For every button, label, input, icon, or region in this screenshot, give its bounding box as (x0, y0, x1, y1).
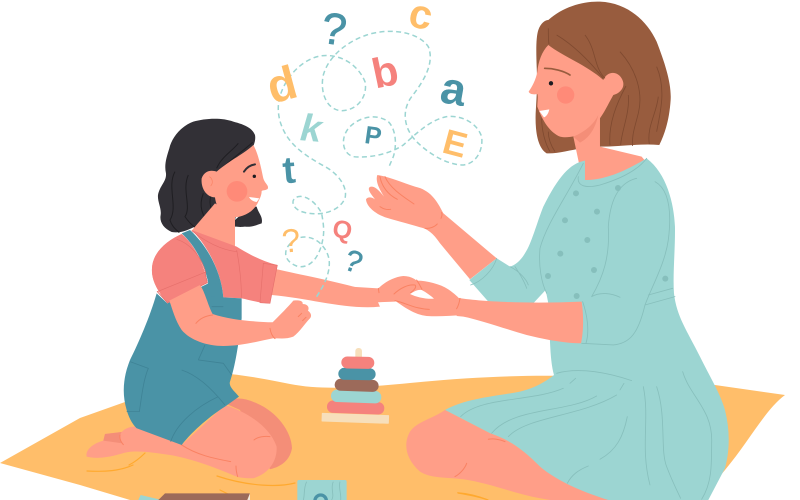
child (86, 119, 380, 478)
woman dress folds and dots (461, 158, 712, 499)
letter k: k (299, 107, 325, 151)
woman leg (406, 410, 613, 500)
woman dress (445, 158, 729, 500)
letter a: a (437, 61, 471, 116)
letter P: P (363, 121, 383, 151)
floating letters (261, 0, 471, 280)
child shirt left sleeve (152, 234, 208, 303)
blanket (0, 373, 785, 500)
dashed thought path (278, 31, 482, 297)
child hair (158, 119, 262, 232)
gap between hands (410, 290, 434, 299)
letter question mark top: ? (318, 4, 350, 56)
child shirt panel under strap (208, 283, 223, 297)
stacking toy pyramid (322, 348, 389, 424)
woman (406, 2, 729, 500)
woman hair (536, 2, 671, 153)
upper raised hand (366, 175, 497, 279)
woman face (529, 45, 623, 137)
letter b: b (368, 46, 402, 97)
child face (202, 145, 268, 217)
child hair strands (170, 142, 253, 233)
hand lines (378, 280, 460, 309)
letter d: d (261, 55, 302, 113)
child legs (86, 405, 277, 478)
child overalls (124, 230, 242, 445)
child neck (192, 203, 235, 250)
woman eye, brow, smile, cheek (557, 86, 574, 104)
orange question mark: ? (280, 221, 302, 260)
letter t: t (281, 150, 297, 193)
child far arm (272, 268, 380, 307)
toys: book and wooden block (138, 480, 347, 500)
clasped hands (350, 276, 462, 316)
letter Q: Q (330, 215, 354, 246)
teal question mark: ? (340, 244, 367, 280)
dashed path tail near child arm (317, 288, 322, 297)
woman near arm (457, 298, 583, 343)
child head (158, 119, 268, 250)
child shirt (152, 230, 277, 303)
woman neck (573, 113, 650, 192)
woman hair strands (542, 28, 662, 152)
letter E: E (439, 122, 471, 166)
woman hand (395, 281, 462, 316)
child far knee (225, 399, 292, 469)
child near arm and hand (169, 285, 311, 346)
child hand (350, 276, 423, 303)
child eye, brow, smile, cheek (227, 181, 247, 202)
